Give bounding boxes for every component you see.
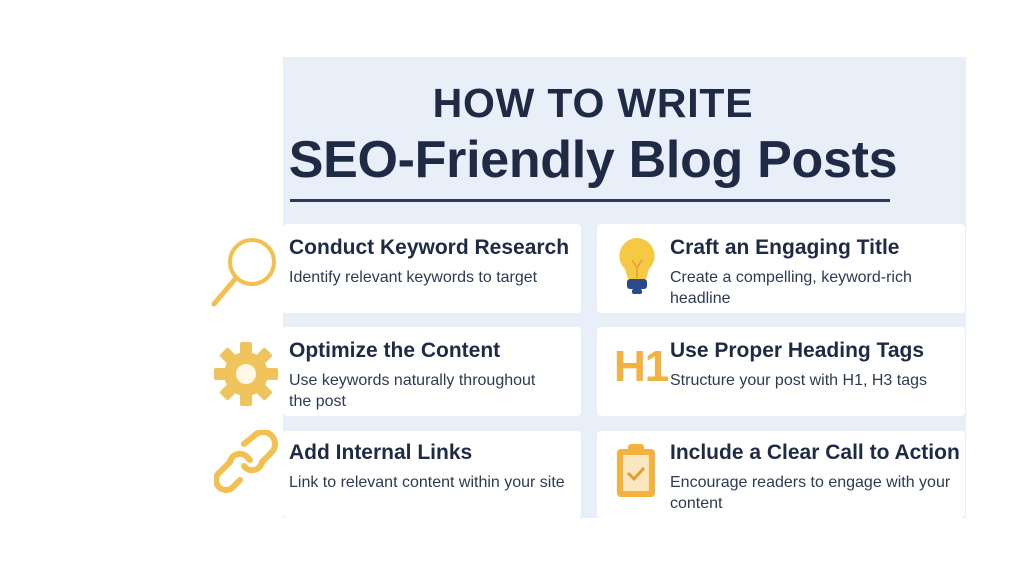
- card: call to action: content: [670, 495, 722, 512]
- icon: clipboard: [617, 444, 655, 497]
- icon: light bulb: [619, 238, 655, 294]
- card: internal links: [283, 431, 581, 518]
- card: keyword research: Conduct Keyword Research: [289, 236, 569, 259]
- card: engaging title: Create a compelling, keyword-rich: [670, 269, 912, 286]
- card: optimize content: the post: [289, 393, 346, 410]
- title underline: [290, 199, 890, 202]
- card: internal links: Link to relevant content within your site: [289, 474, 565, 491]
- icon: magnifier: [212, 238, 276, 306]
- card: engaging title: [597, 224, 965, 313]
- title: HOW TO WRITE: [433, 80, 753, 126]
- card: engaging title: headline: [670, 290, 730, 307]
- card: optimize content: Optimize the Content: [289, 339, 500, 362]
- icon: chain link: [214, 430, 278, 493]
- card: engaging title: Craft an Engaging Title: [670, 236, 899, 259]
- card: heading tags: Structure your post with H1, H3 tags: [670, 372, 927, 389]
- card: call to action: Encourage readers to engage with your: [670, 474, 950, 491]
- card: call to action: Include a Clear Call to Action: [670, 441, 960, 464]
- title: [289, 80, 897, 189]
- card: keyword research: Identify relevant keywords to target: [289, 269, 537, 286]
- card: keyword research: [283, 224, 581, 313]
- icon: gear: [214, 342, 278, 406]
- icon: H1: H1: [614, 342, 668, 391]
- card: internal links: Add Internal Links: [289, 441, 472, 464]
- card: optimize content: Use keywords naturally throughout: [289, 372, 535, 389]
- card: heading tags: Use Proper Heading Tags: [670, 339, 924, 362]
- card: heading tags: [597, 327, 965, 416]
- card: call to action: [597, 431, 965, 518]
- title: SEO-Friendly Blog Posts: [289, 131, 897, 189]
- background panel: [283, 57, 966, 518]
- card: optimize content: [283, 327, 581, 416]
